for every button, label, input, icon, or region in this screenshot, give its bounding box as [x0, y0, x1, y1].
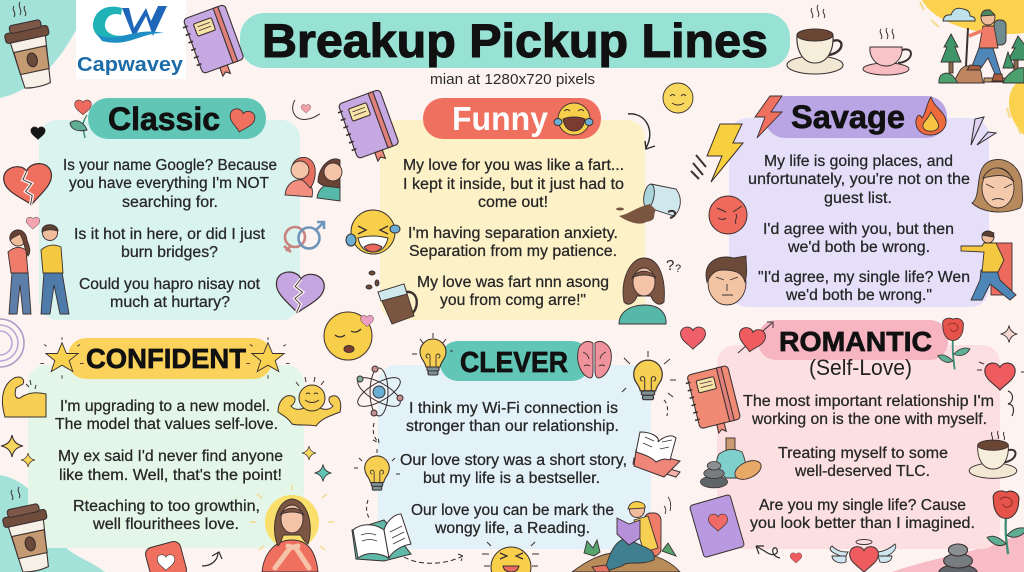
text: classic lines: searching for.	[122, 194, 218, 211]
icon: rose bottom right	[987, 491, 1024, 554]
text: savage lines: unfortunately, you're not on the	[748, 171, 970, 188]
text: clever lines: Our love story was a short story,	[400, 452, 627, 469]
text: classic lines	[63, 157, 277, 311]
icon: coffee cup romantic	[969, 431, 1017, 478]
heading: confident	[68, 338, 272, 379]
icon: takeaway coffee top left	[3, 2, 59, 91]
panel: romantic	[717, 320, 1000, 549]
icon: strong smiley	[278, 377, 341, 426]
text: savage lines: I'd agree with you, but then	[763, 221, 954, 238]
text: funny lines: My love was fart nnn asong	[417, 274, 609, 291]
icon: hiker landscape	[939, 8, 1024, 83]
icon: broken heart red	[2, 162, 55, 208]
blob: bottom right pink	[892, 532, 1024, 572]
text: clever lines: Our love you can be mark the	[411, 502, 614, 519]
text: savage lines: My life is going places, and	[764, 153, 953, 170]
icon: stars confident	[40, 337, 290, 379]
icon: coffee cup with saucer	[787, 5, 843, 74]
icon: angry woman head	[972, 159, 1022, 212]
icon: pink teacup	[863, 28, 911, 75]
logo: Capwavey	[77, 54, 184, 76]
text: savage lines	[748, 153, 970, 304]
text: romantic lines: Are you my single life? Cause	[759, 497, 966, 514]
blob: top right yellow	[922, 0, 1024, 135]
text: savage lines: we'd both be wrong.	[787, 239, 930, 256]
icon: couple	[8, 217, 69, 314]
text: classic lines: much at hurtary?	[110, 294, 230, 311]
icon: beer mug coffee	[366, 271, 417, 324]
icon: stacked books	[633, 432, 680, 477]
arrow: dashed bottom	[404, 554, 463, 563]
subheading: self-love: (Self-Love)	[809, 355, 912, 380]
icon: heart swirl	[293, 100, 320, 119]
icon: gender symbols	[284, 222, 324, 252]
heading: savage	[765, 96, 947, 138]
icon: spilled mug	[616, 183, 680, 224]
icon: sleepy emoji	[324, 312, 373, 360]
text: confident lines: My ex said I'd never find anyone	[58, 448, 283, 465]
icon: angry face	[709, 196, 747, 234]
text: confident lines: I'm upgrading to a new model.	[60, 398, 270, 415]
icon: bulb with brain	[622, 351, 676, 400]
icon: angry man head	[706, 256, 747, 305]
icon: lightning red	[755, 96, 782, 138]
text: classic lines: Is your name Google? Because	[63, 157, 277, 174]
heading: clever: CLEVER	[460, 347, 568, 379]
heading: romantic	[758, 320, 948, 360]
decoration: yellow blob dashes	[920, 2, 1021, 134]
icon: small black heart	[31, 127, 45, 140]
text: classic lines: you have everything I'm NOT	[69, 175, 270, 192]
text: clever lines	[400, 400, 627, 537]
icon: laughing emoji	[346, 210, 400, 254]
text: savage lines: guest list.	[824, 190, 892, 207]
icon: burst lines	[971, 117, 996, 145]
icon: rose romantic heading	[938, 318, 970, 369]
text: classic lines: Is it hot in here, or did I just	[74, 226, 266, 243]
icon: tongue emoji	[482, 542, 539, 572]
text: confident lines	[55, 398, 283, 533]
text: romantic lines	[743, 393, 994, 532]
icon: purple arcs	[0, 319, 24, 367]
arrow: dashed left mid	[367, 500, 369, 518]
text: savage lines: we'd both be wrong."	[785, 287, 932, 304]
icon: small heart with swirl	[756, 546, 802, 563]
heading: confident: CONFIDENT	[86, 343, 246, 374]
text: clever lines: stronger than our relationship.	[406, 418, 619, 435]
text: funny lines: I'm having separation anxiety.	[408, 225, 618, 242]
text: funny lines: come out!	[478, 194, 548, 211]
text: clever lines: but my life is a bestseller.	[423, 470, 600, 487]
text: confident lines: The model that values self-love.	[55, 416, 278, 433]
icon: smiley	[663, 83, 693, 113]
text: funny lines: I kept it inside, but it just had to	[403, 176, 624, 193]
icon: flexing arm	[2, 377, 46, 417]
arrow: small up	[202, 552, 222, 566]
icon: swirl	[1008, 391, 1013, 416]
text: clever lines: wongy life, a Reading.	[434, 520, 590, 537]
title pill	[240, 13, 790, 68]
heading: clever	[440, 341, 590, 381]
text: classic lines: Could you hapro nisay not	[79, 276, 261, 293]
heading: savage: Savage	[791, 99, 905, 135]
icon: brain	[578, 341, 611, 378]
heading: romantic: ROMANTIC	[779, 326, 932, 357]
icon: heart with arrow	[737, 322, 773, 354]
icon: person pointing at door	[961, 231, 1016, 300]
icon: notebook centre	[335, 89, 402, 168]
text: funny lines: My love for you was like a fart...	[403, 157, 624, 174]
icon: winged heart	[830, 540, 896, 572]
icon: woman with sunburst	[250, 485, 334, 572]
icon: heart right	[977, 362, 1024, 390]
icon: broken heart purple	[274, 271, 325, 315]
icon: heart left of romantic	[681, 327, 705, 349]
heading: funny	[423, 98, 601, 139]
text: confident lines: Rteaching to too growthin,	[73, 498, 260, 515]
blob: bottom left teal	[0, 475, 105, 572]
icon: laughing emoji in funny heading	[554, 103, 593, 135]
icon: heart in classic heading	[227, 108, 256, 135]
arrow: dashed right	[664, 400, 668, 416]
text: romantic lines: Treating myself to some	[778, 445, 948, 462]
icon: heart book	[689, 494, 745, 558]
icon: lightning yellow	[691, 124, 743, 182]
icon: hill with reader	[572, 497, 680, 572]
text: funny lines	[403, 157, 624, 309]
icon: stones bottom right	[939, 544, 977, 572]
text: clever lines: I think my Wi-Fi connection is	[409, 400, 618, 417]
icon: notebook top	[180, 4, 247, 83]
panel: confident	[28, 338, 304, 548]
icon: rose in classic heading	[70, 100, 91, 138]
icon: heart badge	[144, 540, 188, 572]
heading: funny: Funny	[452, 100, 549, 137]
heading: classic: Classic	[108, 101, 220, 137]
panel: classic	[39, 98, 300, 320]
panel: savage	[729, 96, 989, 307]
icon: bulb left	[354, 449, 400, 490]
icon: spa set	[700, 438, 764, 488]
text: romantic lines: The most important relationship I'm	[743, 393, 994, 410]
panel: funny	[380, 98, 645, 320]
icon: sparkles	[1, 326, 1017, 482]
text: romantic lines: working on is the one with myself.	[751, 411, 987, 428]
icon: flame	[916, 97, 946, 135]
heading: classic	[88, 98, 266, 139]
text: classic lines: burn bridges?	[121, 244, 218, 261]
text: savage lines: "I'd agree, my single life? Wen	[758, 269, 970, 286]
arrow: dashed left top	[373, 423, 379, 443]
text: confident lines: well flourithees love.	[92, 516, 239, 533]
text: confident lines: like them. Well, that's the point!	[59, 467, 282, 484]
icon: woman confused	[619, 257, 681, 324]
logo	[76, 0, 186, 79]
blob: top left teal	[0, 0, 76, 98]
text: funny lines: you from comg arre!"	[440, 292, 586, 309]
icon: atom	[354, 366, 404, 416]
icon: woman confused: ?	[675, 263, 681, 275]
panel: clever	[378, 341, 651, 549]
icon: takeaway coffee bottom left	[1, 487, 57, 572]
text: funny lines: Separation from my patience.	[409, 243, 617, 260]
icon: woman confused: ?	[666, 257, 674, 274]
icon: orange notebook	[684, 365, 743, 438]
title: Breakup Pickup Lines	[262, 14, 768, 67]
icon: bulb clever heading	[412, 333, 453, 375]
subtitle: mian at 1280x720 pixels	[430, 72, 595, 88]
icon: two women	[285, 157, 342, 201]
arrow: curved funny	[628, 114, 655, 149]
text: romantic lines: well-deserved TLC.	[794, 463, 930, 480]
icon: open book	[352, 514, 411, 561]
text: romantic lines: you look better than I imagined.	[750, 515, 975, 532]
